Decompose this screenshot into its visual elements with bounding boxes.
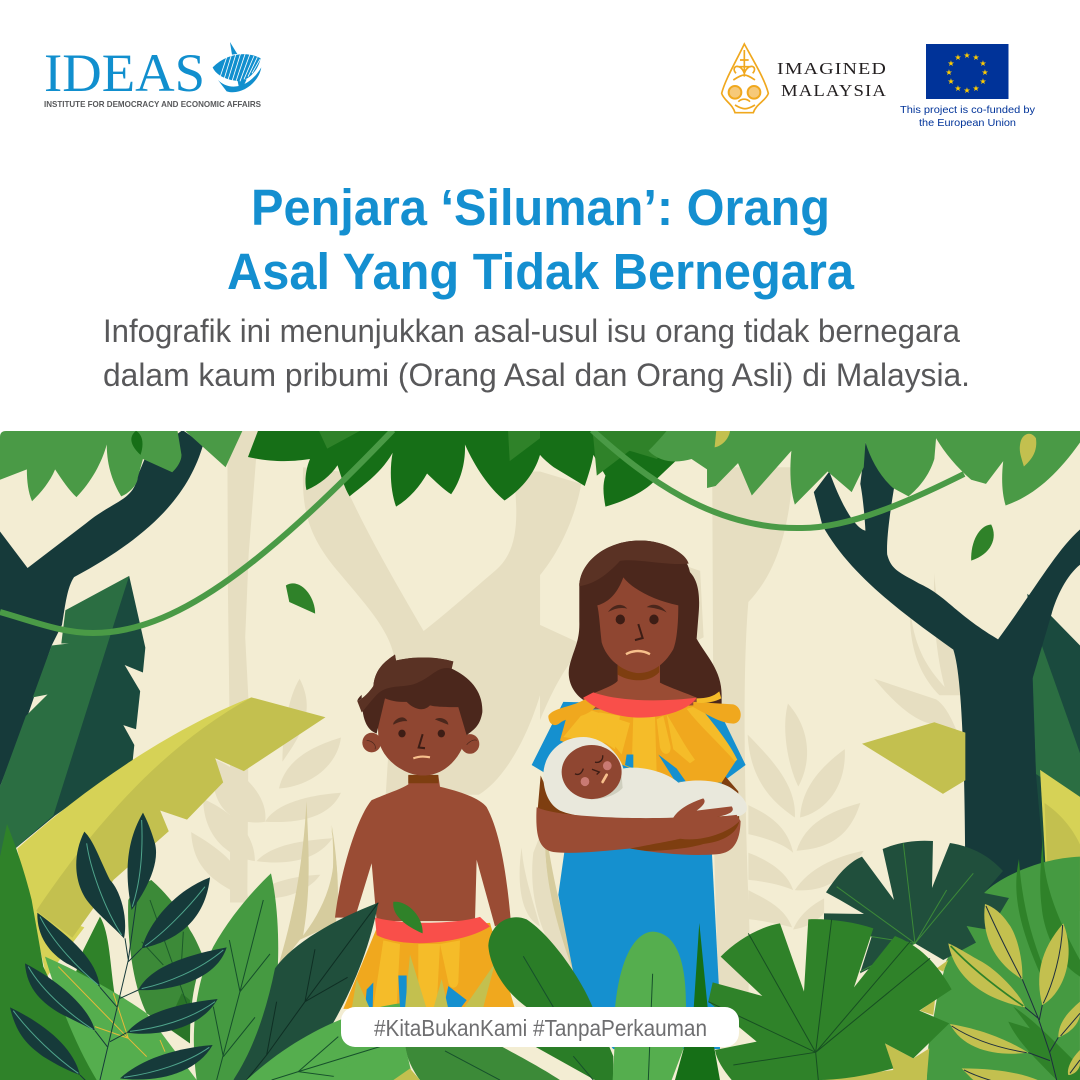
tree and palm: left [0, 430, 325, 977]
logo: IDEAS [44, 42, 262, 109]
big green leaf [194, 873, 278, 1080]
subtitle text: Infografik ini menunjukkan asal-usul isu orang tidak bernegara [103, 313, 960, 349]
light green leaf [45, 957, 197, 1080]
vine: right [592, 430, 964, 528]
dark green leaf under figures [488, 917, 613, 1080]
boy body [335, 776, 511, 926]
title [227, 179, 855, 300]
canopy leaves: right [540, 430, 1080, 507]
mother back arm shadow [538, 776, 740, 820]
yellow background shapes [823, 960, 948, 1080]
big leaf far left [0, 824, 100, 1080]
leaf: floating left [286, 583, 315, 614]
tree and palm: right [814, 442, 1080, 911]
text: EU co-funding note: This project is co-funded by [900, 104, 1036, 116]
logo: EU flag: ★ [972, 84, 980, 93]
logo: EU flag: ★ [947, 77, 955, 86]
logo: IDEAS: IDEAS [44, 43, 205, 103]
figure: mother and baby [532, 541, 747, 1049]
twig with dark leaves [10, 813, 227, 1080]
mother feather collar [548, 691, 741, 783]
leaf on belt [393, 902, 423, 933]
figure: boy [335, 655, 515, 1009]
background: pale trees and ferns right [540, 467, 965, 1010]
boy skirt [343, 917, 515, 1009]
mid green leaf [128, 880, 203, 1043]
logo: EU flag: ★ [954, 53, 962, 62]
grass blades behind figures [332, 826, 573, 970]
title: Penjara ‘Siluman’: Orang [251, 179, 830, 236]
logo: EU flag [926, 44, 1008, 99]
text: EU co-funding note [900, 104, 1036, 129]
icon: IDEAS bird [213, 42, 261, 92]
logo: EU flag: ★ [947, 59, 955, 68]
logo: Imagined Malaysia [722, 44, 887, 113]
boy ears [362, 733, 479, 754]
foreground leaves: center [330, 917, 720, 1080]
icon: wayang emblem [722, 44, 768, 113]
logo: EU flag: ★ [945, 68, 953, 77]
logo: EU flag: ★ [972, 53, 980, 62]
bottom mid leaf [405, 1047, 560, 1080]
banana leaf [17, 697, 325, 977]
tall light green leaf [613, 932, 686, 1080]
subtitle text: dalam kaum pribumi (Orang Asal dan Orang Asli) di Malaysia. [103, 357, 970, 393]
logo: EU flag: ★ [981, 68, 989, 77]
big green bush [927, 834, 1080, 1080]
logo: EU flag: ★ [979, 59, 987, 68]
baby [543, 737, 747, 819]
mother face [579, 541, 689, 673]
logo: IDEAS: INSTITUTE FOR DEMOCRACY AND ECONOMIC AFFAIRS [44, 100, 262, 109]
subtitle text [103, 313, 970, 393]
hashtag pill: #KitaBukanKami #TanpaPerkauman [374, 1015, 707, 1041]
bright leaf [247, 1003, 400, 1080]
dark leaf [233, 903, 378, 1080]
dark fan leaf [824, 841, 1009, 973]
foreground leaves: left cluster [0, 813, 400, 1080]
hashtag pill [341, 1007, 739, 1047]
vine: left [0, 430, 393, 633]
logo: EU flag: ★ [963, 51, 971, 60]
mother dress lower [558, 847, 720, 1049]
logo: EU flag: ★ [979, 77, 987, 86]
grass spike [675, 923, 720, 1080]
mother arms and hand [536, 798, 741, 855]
olive twig leaves [948, 904, 1080, 1080]
boy head [357, 655, 482, 776]
background: pale trees and ferns left [191, 430, 540, 969]
leaf: floating right [971, 525, 994, 561]
text: EU co-funding note: the European Union [919, 117, 1016, 129]
canopy leaves: left [0, 430, 540, 507]
mother neck [583, 665, 697, 709]
panel: jungle illustration [0, 430, 1080, 1080]
logo: EU flag: ★ [954, 84, 962, 93]
title: Asal Yang Tidak Bernegara [227, 243, 855, 300]
foreground leaves: right cluster [708, 834, 1080, 1080]
logo: Imagined Malaysia: MALAYSIA [781, 81, 887, 100]
green fan leaf [708, 919, 952, 1080]
logo: EU flag: ★ [963, 86, 971, 95]
logo: Imagined Malaysia: IMAGINED [777, 59, 887, 78]
mother upper blouse [532, 702, 746, 784]
mother hair [569, 541, 722, 709]
